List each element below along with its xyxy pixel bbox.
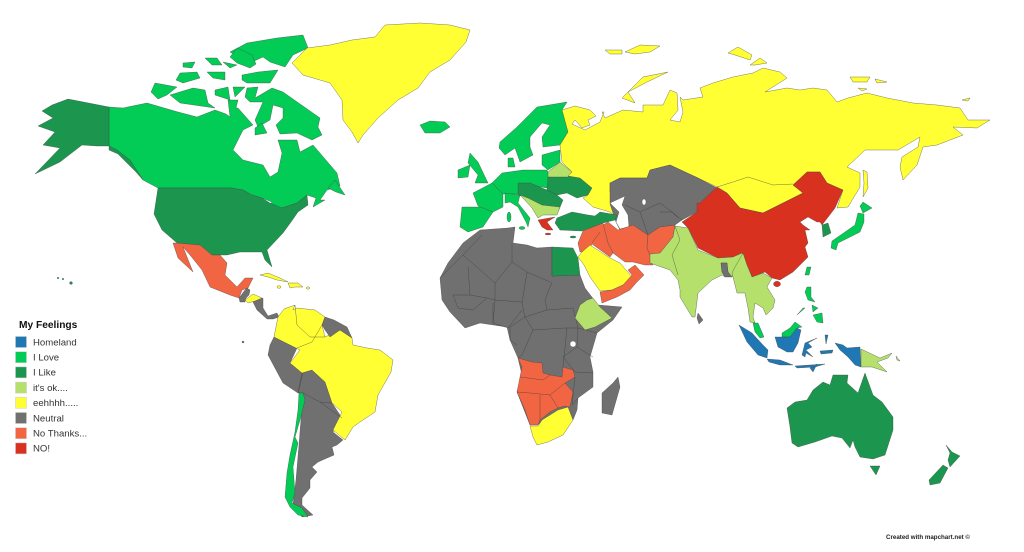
Central America [239,288,279,319]
Egypt [552,247,580,276]
Southern Africa no thanks [517,358,575,425]
Australia [787,373,893,459]
legend item: NO: NO! [33,444,50,455]
China [682,172,843,280]
Canada [109,35,345,213]
Sakhalin [863,170,868,197]
legend item: Neutral: Neutral [33,413,64,424]
Alaska [35,99,143,180]
Hawaii [57,277,72,284]
Mongolia border [717,177,793,187]
legend [16,320,87,455]
Arctic islands [605,45,970,103]
Caspian Sea [610,196,629,229]
South Africa [530,407,573,445]
Malaysia and Philippines [753,287,823,338]
South America [242,305,393,517]
Kazakhstan and Central Asia [610,165,717,235]
Bangladesh [721,263,732,277]
Greenland [292,23,470,143]
India Pakistan border [672,226,680,275]
Aral Sea [642,199,646,205]
India and Pakistan [650,226,746,317]
Iceland [420,121,450,133]
legend title: My Feelings [19,320,78,331]
Russia and Mongolia [560,68,990,218]
South Korea [822,223,831,237]
Lake Victoria [570,341,576,347]
Taiwan [805,267,811,275]
Madagascar [602,377,620,415]
New Zealand [929,445,960,485]
Mexico [173,243,253,298]
Sri Lanka [697,313,703,324]
credit: Created with mapchart.net © [886,534,970,541]
Africa [440,227,622,425]
legend item: Homeland: Homeland [33,337,77,348]
Southeast Asia [732,253,775,323]
legend item: it's ok: it's ok.... [33,383,68,394]
Europe [458,102,592,235]
USA [154,188,308,267]
Tasmania [870,466,880,475]
legend item: eehhhh: eehhhh..... [33,398,78,409]
Papua New Guinea [861,349,900,372]
Indonesia [739,325,861,372]
Ethiopia [575,298,612,330]
Middle East [555,212,675,303]
legend item: No Thanks: No Thanks... [33,428,87,440]
Central Asia borders [625,203,682,220]
Caribbean [260,273,310,289]
legend item: I Love: I Love [33,352,59,364]
legend item: I Like: I Like [33,368,56,379]
Hainan [774,281,780,287]
Japan [831,202,872,250]
